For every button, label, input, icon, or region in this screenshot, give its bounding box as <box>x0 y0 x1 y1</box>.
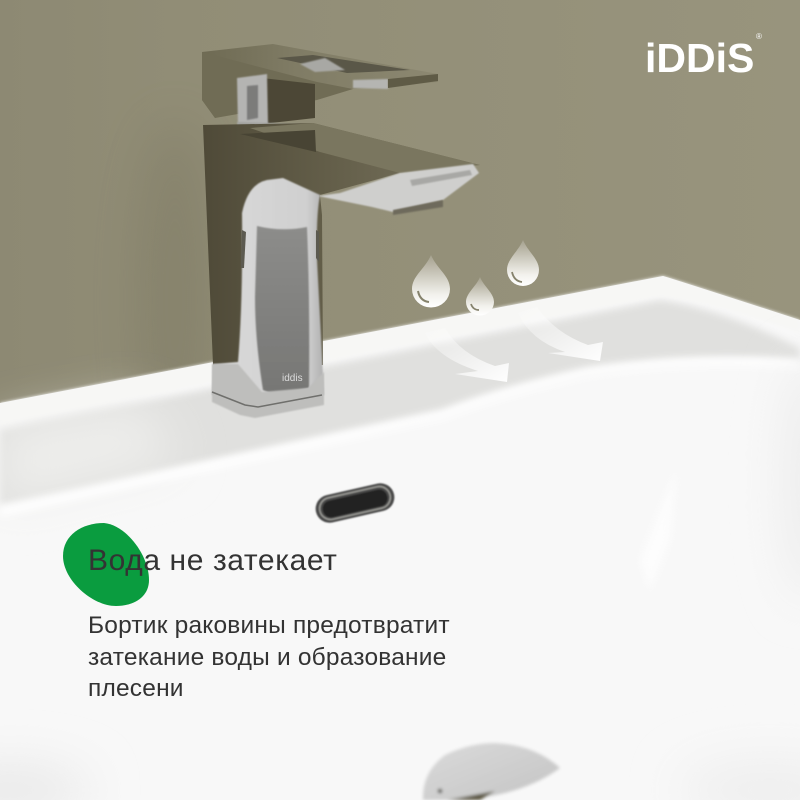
body text: плесени <box>88 675 184 702</box>
arrows showing water runoff <box>425 307 603 382</box>
arrow right <box>518 307 603 361</box>
faucet chrome column <box>212 178 324 395</box>
drop left <box>412 255 450 308</box>
body text: затекание воды и образование <box>88 644 446 670</box>
body text <box>88 612 450 702</box>
basin deck, grey surface behind the ridge <box>0 300 800 505</box>
drop middle <box>466 277 494 316</box>
drop right <box>507 240 539 286</box>
basin inner ridge <box>0 361 800 512</box>
arrow left <box>425 328 509 382</box>
heading: Вода не затекает <box>88 544 338 577</box>
faucet engraved logo: iddis <box>282 373 303 384</box>
basin rim highlight <box>0 276 800 424</box>
faucet body and spout <box>203 123 480 365</box>
background wall <box>0 0 800 480</box>
faucet lever top <box>202 44 438 138</box>
logo: iDDiS <box>645 35 754 81</box>
green blob <box>63 523 149 606</box>
logo: ® <box>756 32 762 41</box>
water drops <box>412 240 539 316</box>
white washbasin <box>0 276 800 800</box>
basin interior shading <box>785 360 800 600</box>
overflow hole <box>313 480 397 526</box>
faucet <box>202 44 480 418</box>
body text: Бортик раковины предотвратит <box>88 612 450 639</box>
faucet base <box>212 364 324 418</box>
drain <box>423 743 560 800</box>
